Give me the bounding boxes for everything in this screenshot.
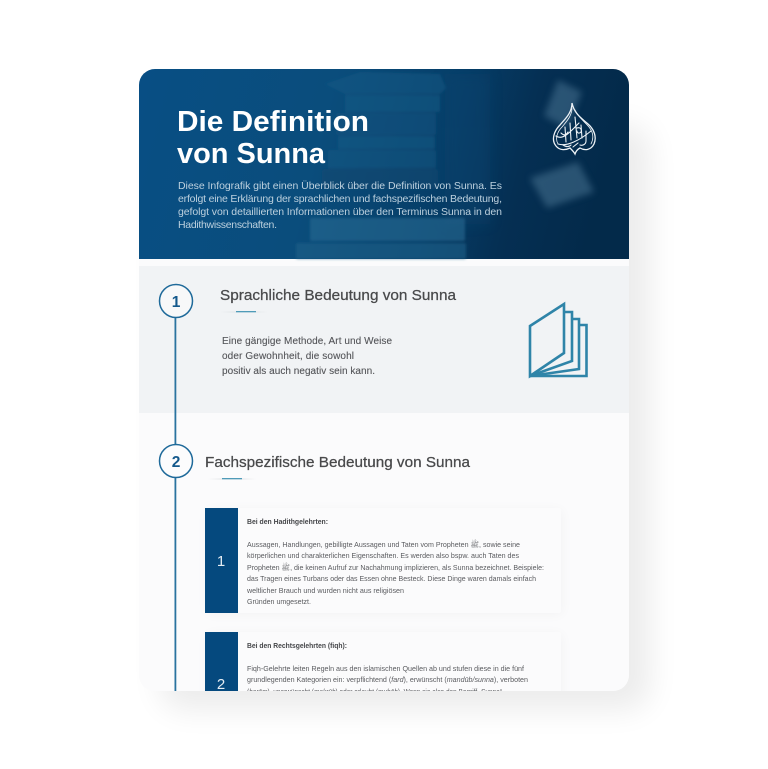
card 1: Hadithgelehrte: das Tragen eines Turbans oder das Essen ohne Besteck. Diese Dinge waren damals einfach	[247, 574, 536, 583]
card 1: Hadithgelehrte	[205, 508, 562, 614]
step marker 1: 1	[172, 294, 181, 311]
body text: oder Gewohnheit, die sowohl	[222, 351, 354, 362]
header intro text	[178, 180, 502, 231]
header intro text: gefolgt von detaillierten Informationen über den Terminus Sunna in den	[178, 206, 502, 218]
card 1: Hadithgelehrte: Gründen umgesetzt.	[247, 597, 311, 606]
card 2: Rechtsgelehrte: Fiqh-Gelehrte leiten Regeln aus den islamischen Quellen ab und stufen diese in die fünf	[247, 664, 525, 673]
panel: Fachspezifische Bedeutung	[205, 456, 544, 691]
icon: open book	[530, 304, 586, 376]
card shadow	[160, 125, 650, 710]
header title	[177, 110, 368, 164]
card 1: Hadithgelehrte: weltlicher Brauch und wurden nicht aus religiösen	[246, 586, 404, 595]
header background: floating pages	[530, 80, 594, 208]
header banner	[139, 69, 629, 259]
heading: Sprachliche Bedeutung von Sunna: Sprachliche Bedeutung von Sunna	[220, 288, 457, 304]
card 2: Rechtsgelehrte: (harām), unerwünscht (makrūh) oder erlaubt (mubāh). Wenn sie also den Begriff „Sunna“	[247, 687, 502, 696]
icon: calligraphy teardrop logo	[553, 103, 595, 154]
card 2: Rechtsgelehrte: grundlegenden Kategorien ein: verpflichtend (fard), erwünscht (mandūb/sunna), verboten	[247, 675, 528, 684]
heading: Fachspezifische Bedeutung von Sunna: Fachspezifische Bedeutung von Sunna	[205, 455, 471, 471]
panel: Sprachliche Bedeutung	[139, 266, 629, 413]
header title: Die Definition	[177, 106, 369, 138]
card 2: Rechtsgelehrte: Bei den Rechtsgelehrten (fiqh):	[247, 641, 347, 650]
card 2: Rechtsgelehrte	[205, 632, 528, 691]
step marker 1	[160, 284, 192, 318]
header intro text: erfolgt eine Erklärung der sprachlichen und fachspezifischen Bedeutung,	[178, 193, 502, 205]
card 1: Hadithgelehrte: körperlichen und charakterlichen Eigenschaften. Es werden also bspw. auch Taten des	[247, 551, 519, 560]
body text: positiv als auch negativ sein kann.	[222, 366, 375, 377]
timeline	[160, 284, 192, 691]
body text: Eine gängige Methode, Art und Weise	[222, 336, 392, 347]
card 1: Hadithgelehrte: Bei den Hadithgelehrten:	[247, 517, 328, 526]
header intro text: Hadithwissenschaften.	[178, 219, 277, 231]
card 1: Hadithgelehrte: Propheten ﷺ, die keinen Aufruf zur Nachahmung implizieren, als Sunna bezeichnet. Beispiele:	[247, 562, 544, 572]
header title: von Sunna	[177, 138, 326, 170]
header background: book stack photo	[296, 72, 466, 259]
step marker 2: 2	[172, 454, 180, 471]
card 2: Rechtsgelehrte: 2	[217, 676, 225, 693]
card 1: Hadithgelehrte: 1	[217, 553, 225, 570]
step marker 2	[160, 444, 192, 478]
header intro text: Diese Infografik gibt einen Überblick über die Definition von Sunna. Es	[178, 180, 502, 192]
body text	[222, 336, 392, 377]
card 1: Hadithgelehrte: Aussagen, Handlungen, gebilligte Aussagen und Taten vom Propheten ﷺ, sowie seine	[247, 539, 520, 549]
infographic card	[139, 69, 629, 704]
